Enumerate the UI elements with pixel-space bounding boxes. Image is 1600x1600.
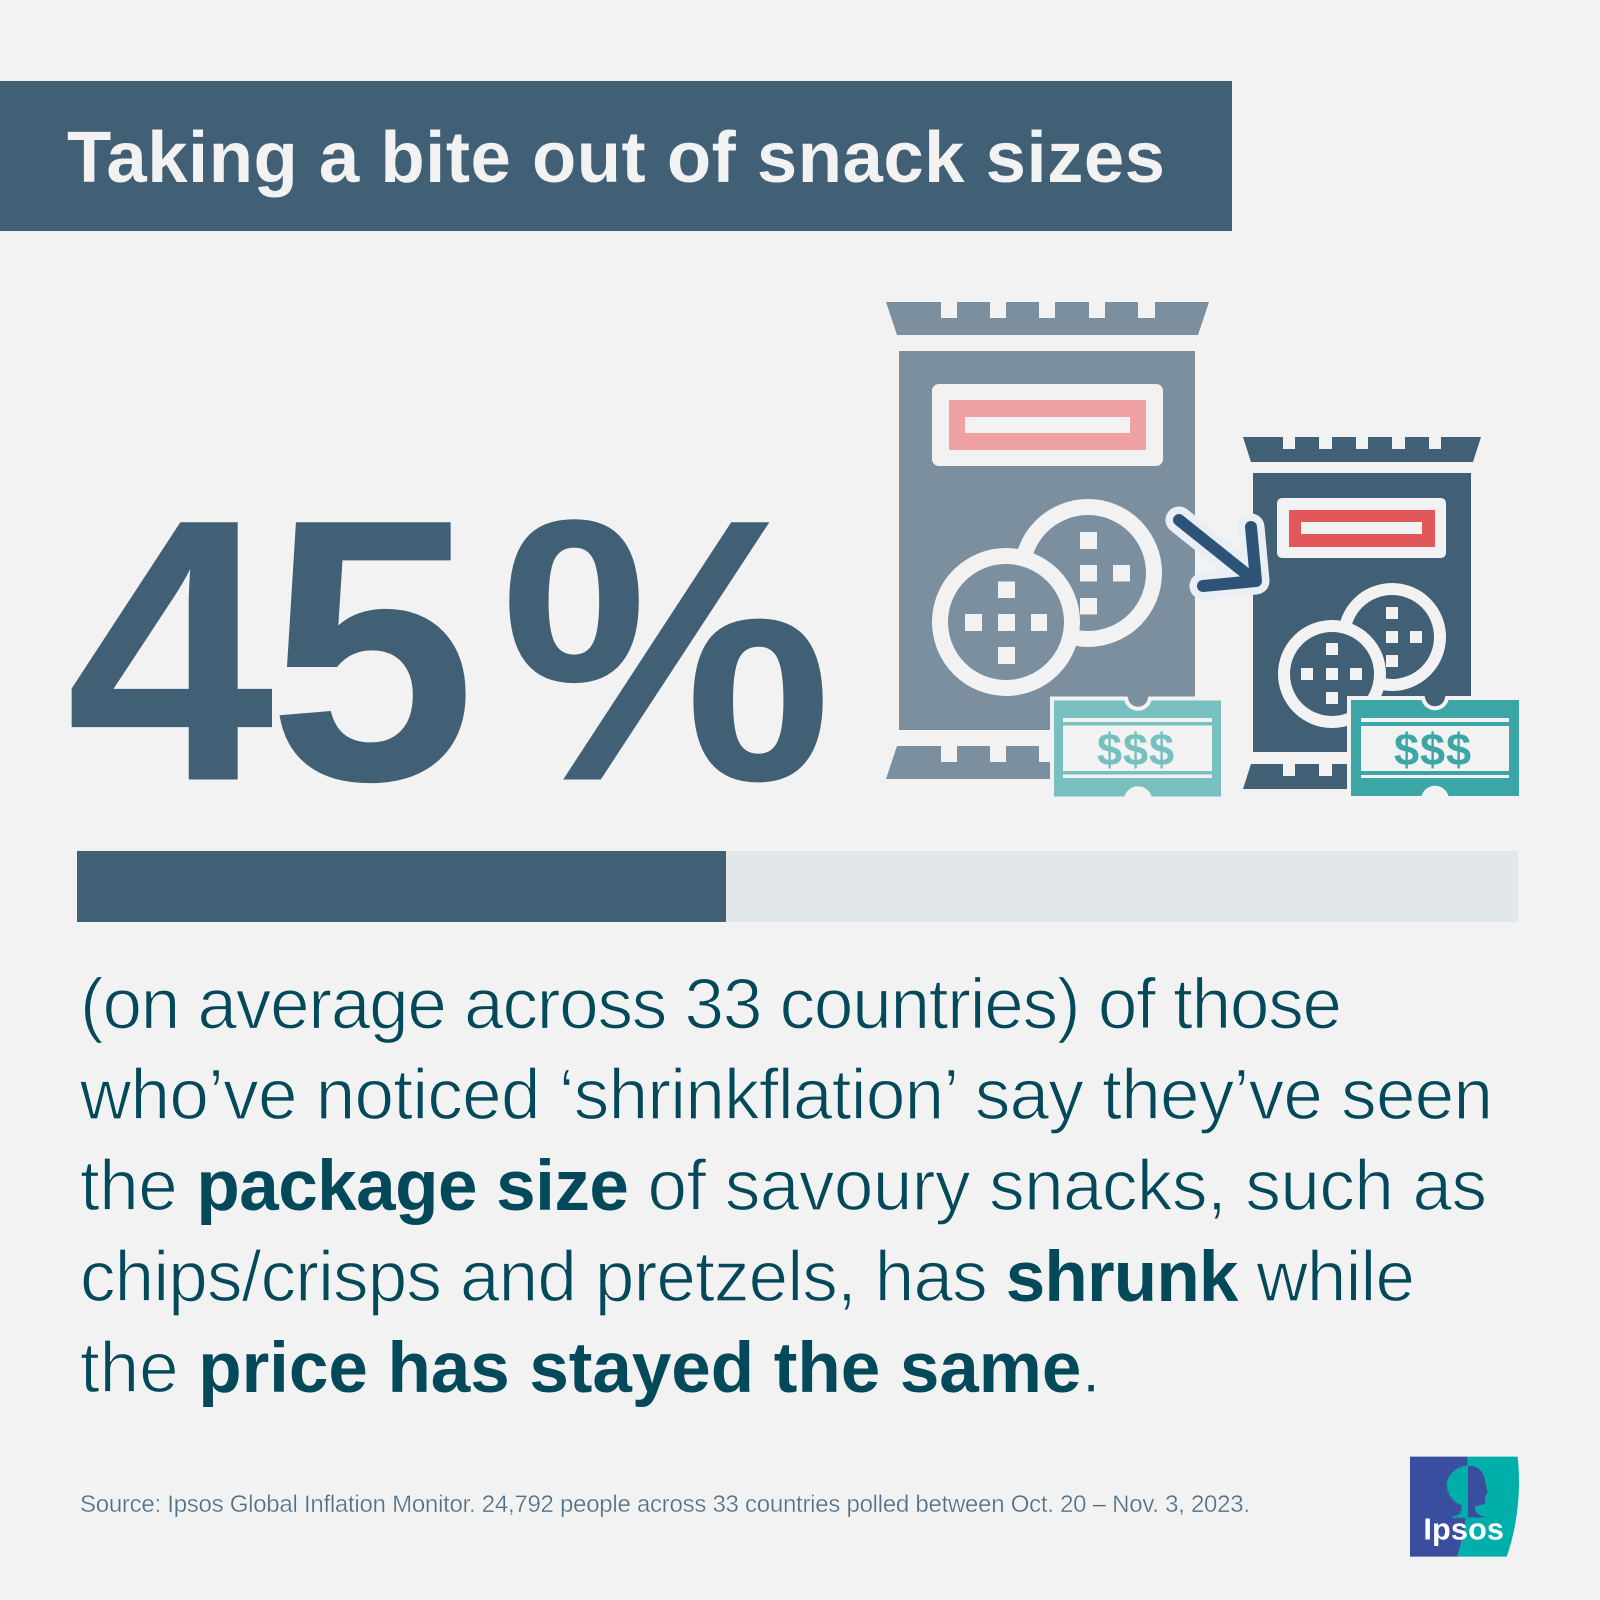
price ticket bbox=[1054, 700, 1221, 796]
Ipsos logo: Ipsos bbox=[1423, 1512, 1504, 1546]
description text: who’ve noticed ‘shrinkflation’ say they’ve seen bbox=[79, 1056, 1493, 1135]
description text bbox=[79, 966, 1493, 1408]
progress bar: 45 percent bbox=[77, 851, 1518, 922]
price ticket: $$$ bbox=[1097, 724, 1175, 775]
description text: chips/crisps and pretzels, has shrunk while bbox=[80, 1238, 1415, 1317]
arrow: from large bag to small bag bbox=[1179, 520, 1256, 586]
bag top crimp bbox=[886, 302, 1209, 335]
bag bottom crimp bbox=[1243, 764, 1347, 789]
description text: (on average across 33 countries) of those bbox=[80, 966, 1342, 1044]
icon: small snack bag with price ticket bbox=[1243, 437, 1519, 796]
bag label bbox=[932, 384, 1163, 466]
source note: Source: Ipsos Global Inflation Monitor. 24,792 people across 33 countries polled between Oct. 20 – Nov. 3, 2023. bbox=[80, 1491, 1250, 1518]
back chip bbox=[1344, 589, 1440, 685]
icon: large snack bag with price ticket bbox=[886, 302, 1221, 796]
back chip bbox=[1022, 507, 1154, 639]
title: Taking a bite out of snack sizes bbox=[67, 117, 1165, 198]
bag label bbox=[1277, 498, 1446, 558]
price ticket: $$$ bbox=[1394, 724, 1472, 775]
bag body bbox=[1253, 473, 1471, 752]
bag top crimp bbox=[1243, 437, 1481, 462]
big statistic: 45%: 45% bbox=[66, 442, 833, 860]
Ipsos logo bbox=[1410, 1457, 1519, 1557]
front chip bbox=[940, 556, 1072, 688]
front chip bbox=[1284, 626, 1380, 722]
bag bottom crimp bbox=[886, 746, 1055, 779]
description text: the price has stayed the same. bbox=[80, 1329, 1101, 1408]
price ticket bbox=[1351, 700, 1519, 796]
description text: the package size of savoury snacks, such as bbox=[80, 1147, 1487, 1226]
bag body bbox=[899, 351, 1195, 730]
title banner bbox=[0, 81, 1232, 231]
